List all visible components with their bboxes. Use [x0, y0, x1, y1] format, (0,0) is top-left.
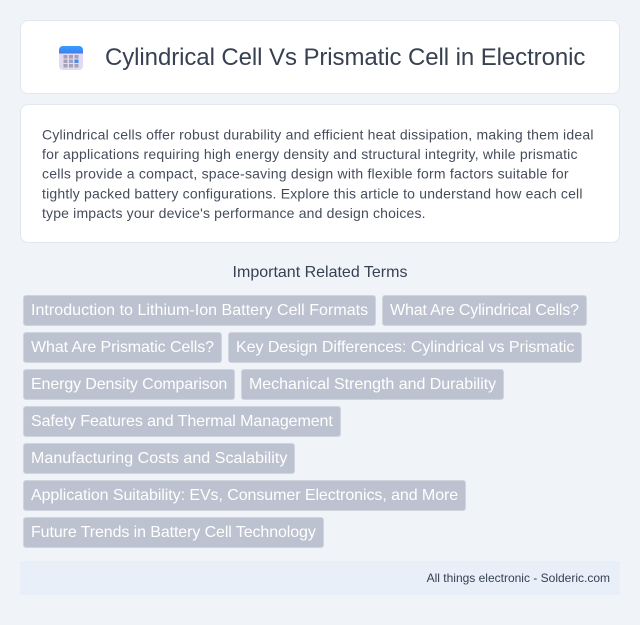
icon: calendar: [59, 46, 83, 70]
intro text panel: tightly packed battery configurations. Explore this article to understand how each cell: [42, 185, 582, 201]
footer: [20, 561, 620, 595]
footer: All things electronic - Solderic.com: [427, 571, 610, 585]
title: Cylindrical Cell Vs Prismatic Cell in Electronic: [105, 44, 585, 71]
related terms tags: Key Design Differences: Cylindrical vs Prismatic: [236, 339, 574, 356]
related terms tags: Manufacturing Costs and Scalability: [31, 450, 287, 467]
intro text panel: for applications requiring high energy density and structural integrity, while prismatic: [42, 146, 578, 162]
intro text panel: [20, 104, 620, 243]
intro text panel: type impacts your device's performance and design choices.: [42, 205, 426, 221]
related terms tags: [23, 295, 587, 548]
intro text panel: cells provide a compact, space-saving design with flexible form factors suitable for: [42, 166, 569, 182]
section heading: Important Related Terms: [233, 264, 407, 281]
related terms tags: Introduction to Lithium-Ion Battery Cell Formats: [31, 302, 368, 319]
related terms tags: Safety Features and Thermal Management: [31, 413, 333, 430]
intro text panel: Cylindrical cells offer robust durability and efficient heat dissipation, making them ideal: [42, 126, 594, 142]
related terms tags: Energy Density Comparison: [31, 376, 227, 393]
related terms tags: What Are Cylindrical Cells?: [390, 302, 579, 319]
related terms tags: Future Trends in Battery Cell Technology: [31, 524, 316, 541]
related terms tags: What Are Prismatic Cells?: [31, 339, 214, 356]
header panel: [20, 20, 620, 94]
related terms tags: Mechanical Strength and Durability: [249, 376, 496, 393]
related terms tags: Application Suitability: EVs, Consumer Electronics, and More: [31, 487, 458, 504]
